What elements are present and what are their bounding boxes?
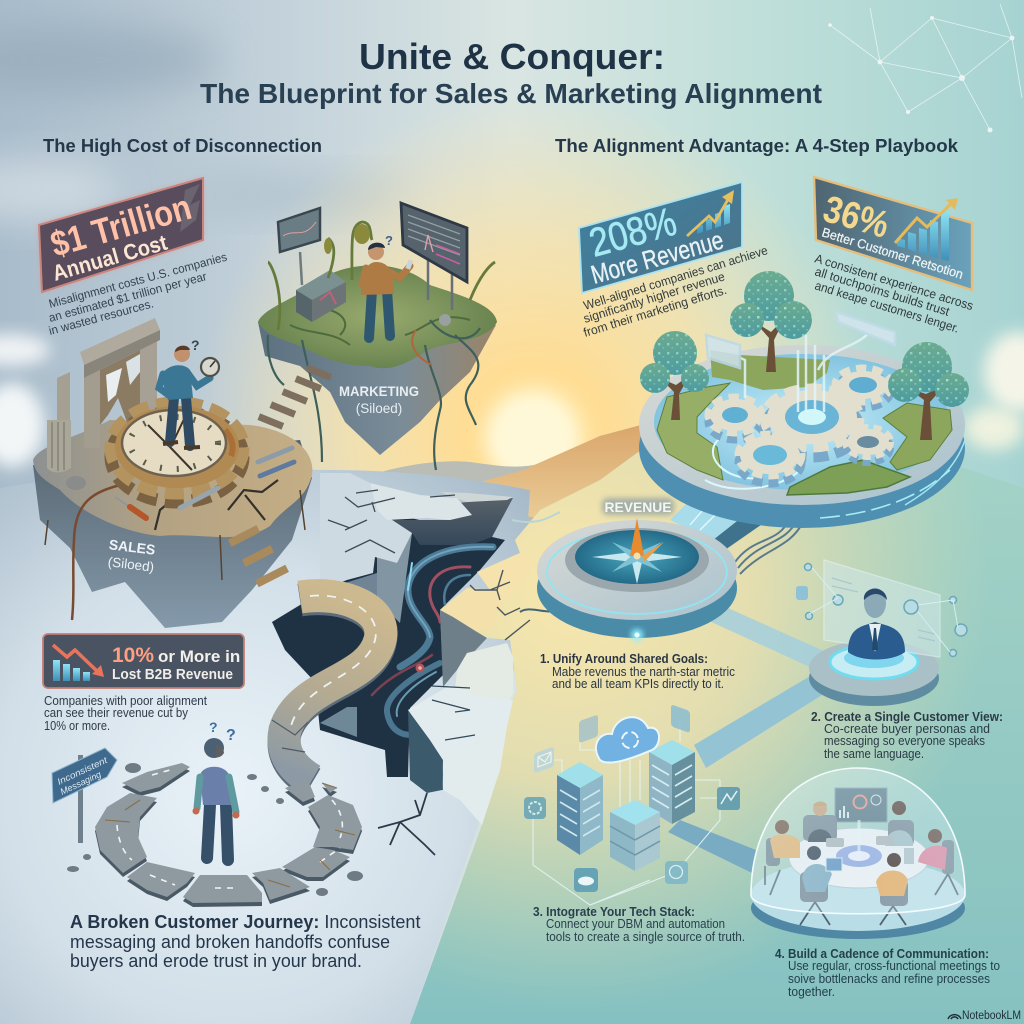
step 4: meeting dome	[751, 768, 965, 939]
meeting participants	[765, 801, 958, 925]
text: 36 percent description: A consistent experience across	[813, 251, 975, 313]
label: marketing siloed: (Siloed)	[356, 401, 402, 416]
tools	[115, 448, 294, 518]
broken circular road	[67, 763, 363, 907]
sun and far mountains	[340, 392, 680, 540]
server tower front	[610, 800, 660, 871]
ground: left pale plateau	[0, 469, 530, 1024]
callout: $1 trillion: $1 Trillion	[46, 186, 196, 265]
text: step 3: Connect your DBM and automation	[546, 917, 725, 931]
cracked pale cliff plates	[320, 473, 513, 855]
label: marketing siloed	[339, 383, 419, 416]
step 2: customer view hologram	[796, 560, 967, 706]
text: poor alignment description: Companies with poor alignment	[44, 694, 207, 708]
heading: high cost of disconnection: The High Cost of Disconnection	[43, 136, 322, 156]
text: broken customer journey	[70, 912, 420, 971]
text: broken customer journey: messaging and broken handoffs confuse	[70, 932, 390, 952]
fragmented road into chasm	[272, 595, 381, 783]
text: step 3: tools to create a single source of truth.	[546, 930, 745, 944]
ground: right warm-to-teal plateau	[410, 436, 1024, 1024]
confused person at centre of road	[192, 719, 240, 860]
broken clock gear	[111, 403, 243, 502]
conference table	[789, 820, 929, 888]
inconsistent messaging signpost	[52, 748, 117, 843]
callout: $1 trillion: Annual Cost	[50, 229, 170, 286]
callout: 36 percent retention: Better Customer Retsotion	[820, 225, 965, 282]
callout: 10 percent lost revenue	[43, 634, 244, 688]
text: broken customer journey: A Broken Customer Journey: Inconsistent	[70, 912, 420, 932]
person with phone: ?	[385, 233, 393, 248]
icon: rising chart	[687, 190, 734, 236]
label: sales siloed	[106, 536, 157, 575]
text: step 4	[775, 947, 1000, 999]
text: 36 percent description: all touchpoims builds trust	[813, 264, 952, 319]
callout: 208 percent more revenue: More Revenue	[588, 225, 727, 290]
connector lines	[533, 718, 728, 905]
text: step 4: soive bottlenacks and refine processes	[788, 972, 990, 986]
text: step 4: Use regular, cross-functional meetings to	[788, 959, 1000, 973]
icon: cloud	[596, 717, 659, 763]
dashboard screen	[835, 788, 887, 822]
aligned platform with gears and trees	[639, 271, 969, 574]
overgrown box and wilted plants	[268, 222, 495, 330]
person with phone	[361, 233, 413, 338]
trees	[640, 271, 969, 440]
title: Unite & Conquer:	[359, 36, 665, 77]
label: sales siloed: SALES	[108, 536, 156, 558]
callout: 10 percent lost revenue: Lost B2B Revenue	[112, 667, 233, 683]
text: step 2: 2. Create a Single Customer View:	[811, 710, 1003, 724]
title	[200, 36, 822, 109]
text: poor alignment description: 10% or more.	[44, 719, 110, 733]
chasm with tangled cables	[272, 498, 513, 817]
person with stopwatch	[159, 337, 219, 448]
icon: rising chart	[895, 198, 958, 261]
text: step 2: Co-create buyer personas and	[824, 722, 990, 736]
label: sales siloed: (Siloed)	[107, 554, 155, 575]
step 1: revenue compass	[537, 518, 737, 641]
text: misalignment cost description: an estimated $1 trillion per year	[47, 269, 208, 325]
connector: step 2 to step 3	[694, 675, 830, 768]
text: 36 percent description: and keape customers lenger.	[813, 278, 961, 336]
text: 208 percent description	[582, 243, 770, 340]
connector: step 3 to step 4	[668, 820, 756, 873]
title: The Blueprint for Sales & Marketing Alignment	[200, 78, 822, 109]
callout: 208 percent more revenue	[579, 182, 742, 293]
inconsistent messaging signpost: Messaging	[59, 769, 103, 797]
icons: tech tiles	[524, 704, 740, 892]
text: step 2: the same language.	[824, 747, 924, 761]
server tower right	[649, 740, 695, 824]
text: poor alignment description: can see their revenue cut by	[44, 706, 189, 720]
text: step 3	[533, 905, 745, 944]
text: step 4: 4. Build a Cadence of Communication:	[775, 947, 989, 961]
text: step 3: 3. Intograte Your Tech Stack:	[533, 905, 695, 919]
callout: 208 percent more revenue: 208%	[585, 200, 681, 266]
text: 208 percent description: significantly higher revenue	[582, 269, 726, 326]
confused person at centre of road: ?	[209, 719, 218, 735]
confused person at centre of road: ?	[226, 727, 236, 744]
text: step 1: 1. Unify Around Shared Goals:	[540, 652, 708, 666]
callout: $1 trillion	[39, 178, 203, 292]
island: sales	[33, 318, 312, 628]
text: misalignment cost description	[47, 250, 229, 338]
text: step 1: Mabe revenus the narth-star metric	[552, 665, 735, 679]
callout: 36 percent retention	[814, 177, 972, 290]
text: 208 percent description: from their marketing efforts.	[582, 283, 728, 340]
callout: 10 percent lost revenue: 10%or More in	[112, 644, 240, 667]
text: step 2: messaging so everyone speaks	[824, 734, 985, 748]
screens on posts	[278, 203, 467, 310]
glass dome	[751, 768, 965, 914]
inconsistent messaging signpost: Inconsistent	[56, 755, 109, 787]
person with stopwatch: ?	[191, 337, 200, 353]
text: 208 percent description: Well-aligned companies can achieve	[582, 243, 770, 313]
gears	[709, 369, 890, 483]
label: marketing siloed: MARKETING	[339, 383, 419, 399]
text: step 1: and be all team KPIs directly to it.	[552, 677, 724, 691]
network constellation decoration	[828, 4, 1022, 132]
island: marketing	[258, 203, 497, 470]
text: poor alignment description	[44, 694, 207, 733]
label: revenue: REVENUE	[604, 499, 672, 515]
temple ruins	[47, 318, 160, 490]
data stream panels	[706, 312, 895, 412]
heading: alignment advantage: The Alignment Advantage: A 4-Step Playbook	[555, 136, 959, 156]
text: step 4: together.	[788, 985, 835, 999]
connector: step 1 to step 2	[696, 600, 826, 668]
server tower left	[557, 762, 603, 855]
text: misalignment cost description: Misalignment costs U.S. companies	[47, 250, 229, 311]
step 3: tech stack	[524, 704, 740, 905]
icon: falling chart	[53, 645, 104, 681]
text: step 2	[811, 710, 1003, 761]
text: misalignment cost description: in wasted resources.	[47, 296, 155, 338]
broken plank bridges	[228, 364, 332, 587]
text: broken customer journey: buyers and erode trust in your brand.	[70, 951, 362, 971]
callout: 36 percent retention: 36%	[819, 188, 894, 247]
text: step 1	[540, 652, 735, 691]
